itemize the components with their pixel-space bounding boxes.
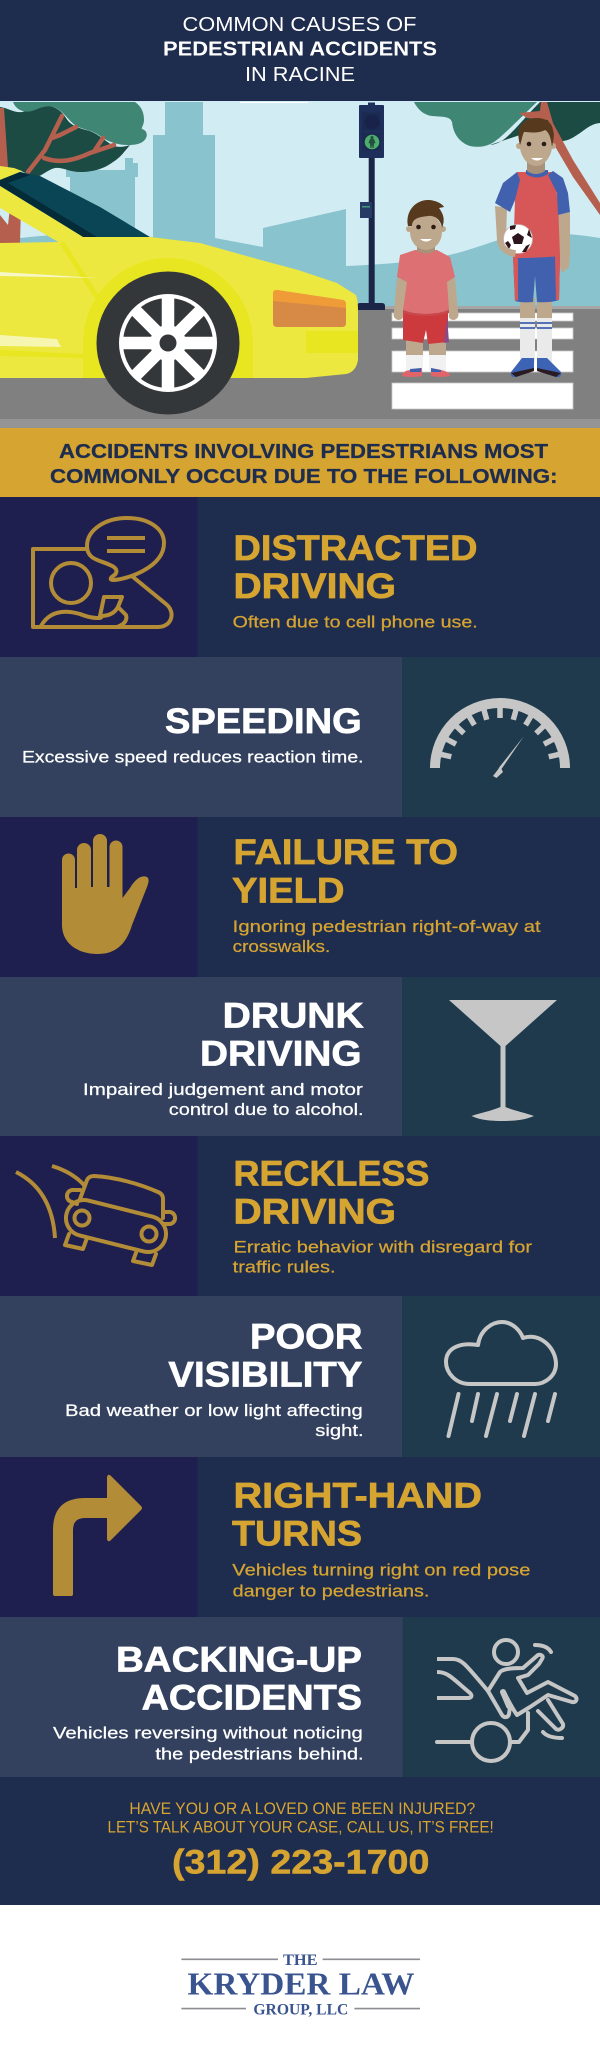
panel: failure to yield [0,817,600,977]
panel: right-hand turns: TURNS [232,1513,362,1553]
panel: poor visibility: VISIBILITY [168,1355,363,1395]
icon: speedometer [430,698,570,778]
panel: poor visibility [0,1296,600,1457]
boy [394,200,458,377]
icon: martini glass [449,1000,557,1121]
panel: reckless driving [0,1136,600,1296]
car [0,166,358,414]
panel: distracted driving [0,497,600,657]
header: title [0,0,600,101]
heading: RECKLESS [234,1153,429,1193]
call to action: HAVE YOU OR A LOVED ONE BEEN INJURED? [129,1800,475,1818]
description: Often due to cell phone use. [233,613,478,632]
panel: speeding [0,657,600,817]
panel: right-hand turns: danger to pedestrians. [233,1581,429,1600]
header: title: IN RACINE [245,63,355,86]
description: Ignoring pedestrian right-of-way at [233,917,541,936]
call to action [0,1777,600,1905]
icon: phone user with speech bubble [33,518,172,627]
heading: POOR [250,1316,362,1356]
header: title: PEDESTRIAN ACCIDENTS [163,38,437,61]
icon: pedestrian struck by reversing car [437,1640,576,1761]
heading: FAILURE TO [234,832,458,872]
intro banner [0,428,600,498]
logo: The Kryder Law Group, LLC: GROUP, LLC [253,2002,348,2019]
intro banner: COMMONLY OCCUR DUE TO THE FOLLOWING: [50,465,558,488]
illustration: car and pedestrians at a crosswalk [0,101,600,428]
road and crosswalk [0,306,600,428]
description: Vehicles reversing without noticing [53,1723,363,1742]
panel: failure to yield: YIELD [232,871,344,911]
header: title: COMMON CAUSES OF [182,13,416,36]
description: Impaired judgement and motor [83,1080,363,1099]
heading: DRUNK [223,996,364,1036]
panel: backing-up accidents: ACCIDENTS [142,1677,362,1717]
icon: right turn arrow [53,1475,142,1596]
panel: backing-up accidents: the pedestrians behind. [155,1744,364,1764]
description: Erratic behavior with disregard for [234,1237,532,1256]
panel: right-hand turns [0,1457,600,1617]
phone number: (312) 223-1700 [172,1843,429,1881]
panel: reckless driving: DRIVING [234,1191,396,1231]
heading: DISTRACTED [234,528,478,568]
panel: drunk driving [0,977,600,1136]
man with soccer ball [495,118,570,377]
left tree [0,102,147,243]
panel: backing-up accidents [0,1617,600,1777]
heading: SPEEDING [165,701,362,741]
panel: poor visibility: sight. [315,1421,364,1440]
logo: The Kryder Law Group, LLC: KRYDER LAW [188,1966,414,2002]
panel: failure to yield: crosswalks. [233,937,330,956]
panel: drunk driving: DRIVING [200,1034,362,1074]
icon: swerving car [16,1166,175,1265]
description: Bad weather or low light affecting [65,1401,363,1420]
description: Vehicles turning right on red pose [232,1560,530,1580]
panel: reckless driving: traffic rules. [233,1258,336,1277]
heading: BACKING-UP [116,1640,362,1680]
city skyline [0,102,600,310]
panel: distracted driving: DRIVING [234,566,396,606]
logo: The Kryder Law Group, LLC [181,1952,420,2019]
logo: The Kryder Law Group, LLC: THE [283,1952,318,1969]
panel: drunk driving: control due to alcohol. [169,1100,364,1119]
call to action: LET’S TALK ABOUT YOUR CASE, CALL US, IT’S FREE! [108,1819,494,1837]
icon: rain cloud [446,1322,556,1436]
description: Excessive speed reduces reaction time. [22,748,363,767]
icon: raised hand [62,834,149,954]
intro banner: ACCIDENTS INVOLVING PEDESTRIANS MOST [59,440,549,463]
right tree [414,102,600,215]
heading: RIGHT-HAND [234,1476,482,1516]
pedestrian signal [357,102,385,310]
